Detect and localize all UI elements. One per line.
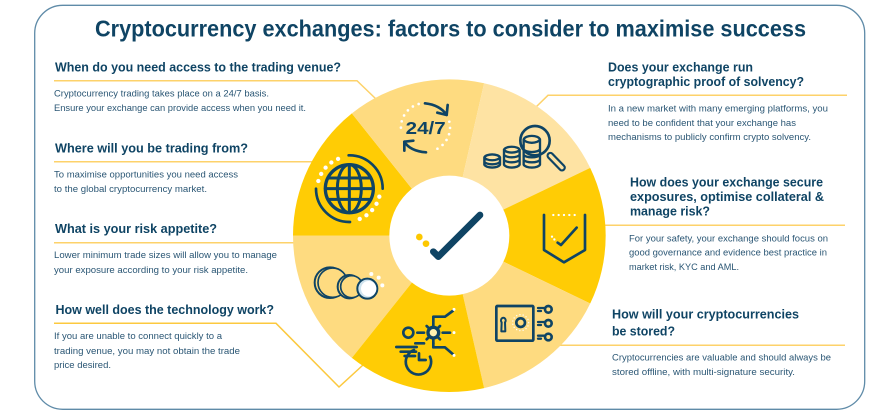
heading: cryptographic proof of solvency?	[608, 74, 804, 89]
body text	[612, 353, 831, 378]
body text: Lower minimum trade sizes will allow you to manage	[54, 250, 277, 261]
body text: In a new market with many emerging platforms, you	[608, 103, 828, 114]
body text	[54, 250, 277, 276]
segment: storage	[449, 236, 590, 388]
segment: location	[293, 113, 449, 236]
heading: exposures, optimise collateral &	[630, 189, 824, 204]
icon: 24/7	[401, 103, 450, 152]
heading: Does your exchange run	[608, 60, 753, 75]
connector	[536, 95, 847, 107]
body text: trading venue, you may not obtain the trade	[54, 346, 240, 357]
panel: technology	[54, 302, 363, 387]
body text: to the global cryptocurrency market.	[54, 184, 207, 195]
segment: solvency	[449, 83, 590, 236]
icon: globe	[316, 155, 383, 222]
body text: your exposure according to your risk appetite.	[54, 265, 248, 276]
segment: security	[449, 168, 606, 303]
body text: Cryptocurrencies are valuable and should always be	[612, 353, 831, 364]
connector	[54, 323, 363, 387]
heading: Where will you be trading from?	[55, 141, 248, 156]
body text	[54, 170, 238, 195]
segment: technology	[352, 236, 484, 392]
panel: risk appetite	[54, 221, 294, 276]
wheel	[293, 79, 606, 392]
body text: market risk, KYC and AML.	[629, 262, 739, 273]
connector	[54, 81, 376, 99]
heading: How will your cryptocurrencies	[612, 306, 799, 321]
body text: mechanisms to publicly confirm crypto solvency.	[608, 132, 811, 143]
body text: stored offline, with multi-signature security.	[612, 367, 795, 378]
body text	[54, 331, 240, 371]
connector	[560, 344, 845, 346]
body text: To maximise opportunities you need access	[54, 170, 238, 181]
segment: risk	[293, 236, 449, 358]
heading: How does your exchange secure	[630, 175, 823, 190]
centre disc with check mark	[389, 176, 509, 296]
connector	[54, 161, 314, 163]
body text	[54, 89, 306, 114]
heading	[608, 60, 804, 89]
heading: What is your risk appetite?	[55, 221, 217, 236]
segment: 24/7	[352, 79, 484, 236]
heading	[630, 175, 824, 219]
body text: Cryptocurrency trading takes place on a 24/7 basis.	[54, 89, 269, 100]
panel: trading location	[54, 141, 314, 195]
body text	[629, 233, 828, 273]
icon: technology gear and clock	[396, 308, 455, 375]
icon: coins under magnifier	[484, 126, 562, 168]
heading: be stored?	[612, 324, 675, 339]
heading: How well does the technology work?	[56, 302, 274, 317]
connector	[54, 242, 294, 244]
panel: secure exposures	[604, 175, 845, 273]
body text: For your safety, your exchange should focus on	[629, 233, 828, 244]
panel: proof of solvency	[536, 60, 847, 143]
heading: manage risk?	[630, 204, 710, 219]
connector	[604, 224, 845, 226]
panel: trading venue access	[54, 60, 376, 114]
body text: price desired.	[54, 360, 111, 371]
panel: storage	[560, 306, 845, 378]
body text: need to be confident that your exchange has	[608, 118, 796, 129]
title: Cryptocurrency exchanges: factors to consider to maximise success	[95, 16, 806, 42]
icon: 24/7: 24/7	[406, 118, 446, 138]
icon: shield with check	[544, 215, 585, 262]
body text: Ensure your exchange can provide access when you need it.	[54, 103, 306, 114]
icon: safe with keys	[496, 306, 552, 341]
heading	[612, 306, 799, 339]
body text	[608, 103, 828, 143]
body text: good governance and evidence best practice in	[629, 248, 827, 259]
body text: If you are unable to connect quickly to a	[54, 331, 223, 342]
icon: three coins	[315, 267, 384, 299]
heading: When do you need access to the trading venue?	[55, 60, 341, 75]
